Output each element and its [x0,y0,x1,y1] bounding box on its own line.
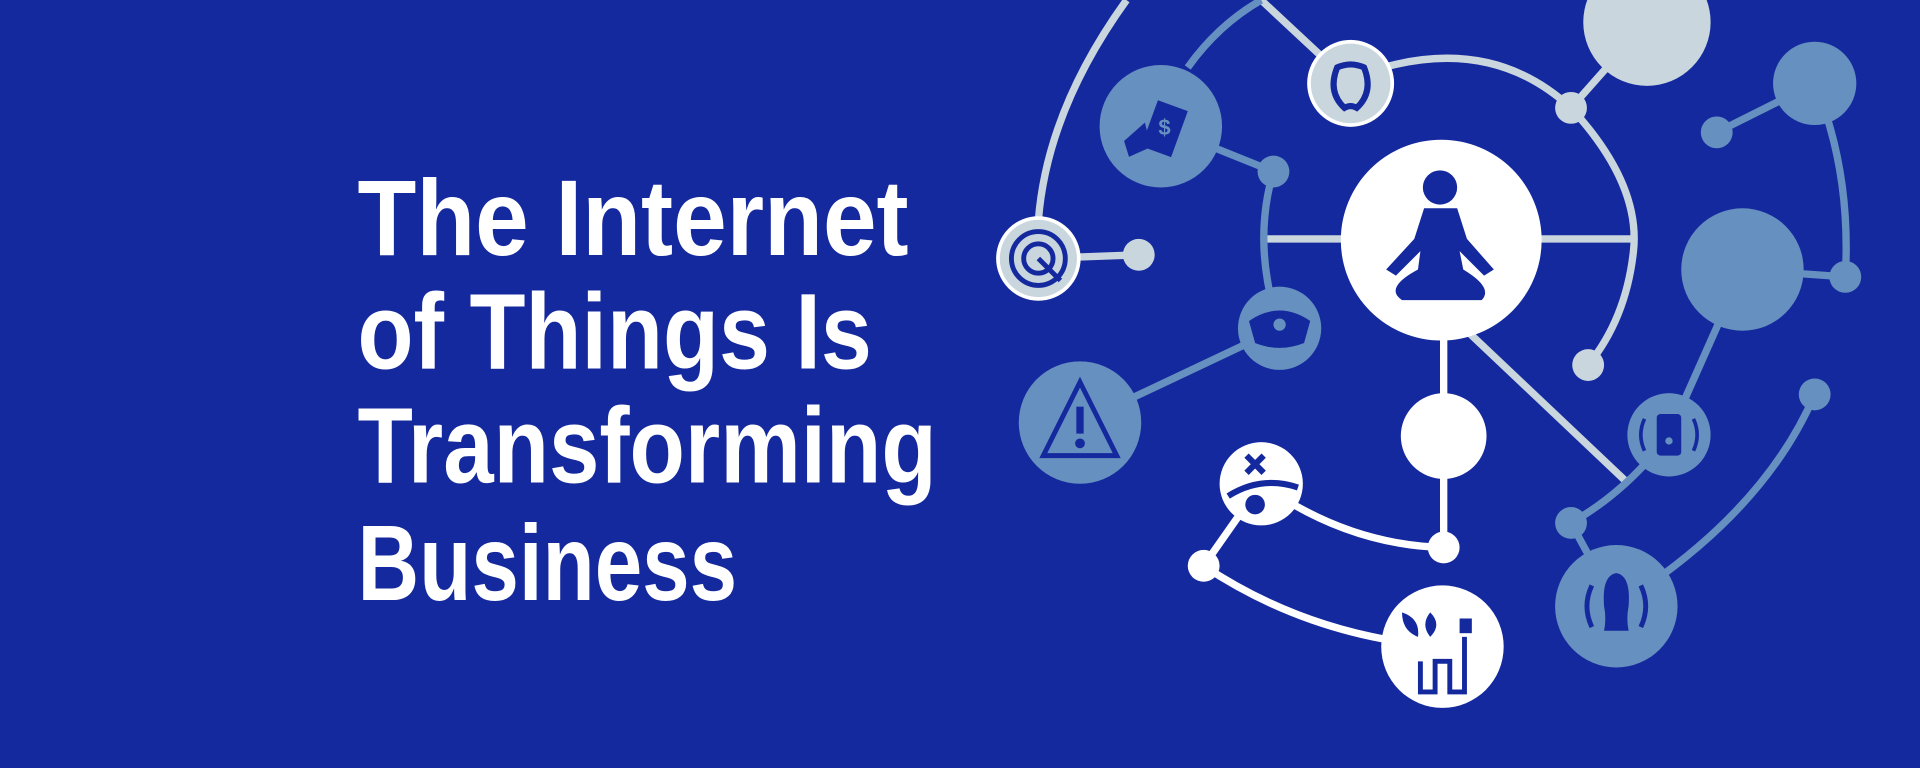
icon: eye mask [1220,442,1303,525]
icon: footprint [1555,545,1678,667]
title: Business [358,502,737,623]
icon: warning [1019,361,1141,484]
icon: radar [998,218,1079,299]
network lines [1038,0,1846,647]
icon: meditation [1341,140,1542,341]
icon: money: $ [1158,115,1171,140]
icon: phone [1627,393,1711,476]
icon: police cap [1238,287,1321,370]
icon: money [1100,65,1222,187]
title: of Things Is [358,271,872,392]
title: Transforming [358,385,937,506]
title [358,157,937,623]
icon: apple [1309,42,1392,125]
title: The Internet [358,157,909,278]
icon: plant plug [1381,585,1504,708]
nodes [1123,0,1861,582]
